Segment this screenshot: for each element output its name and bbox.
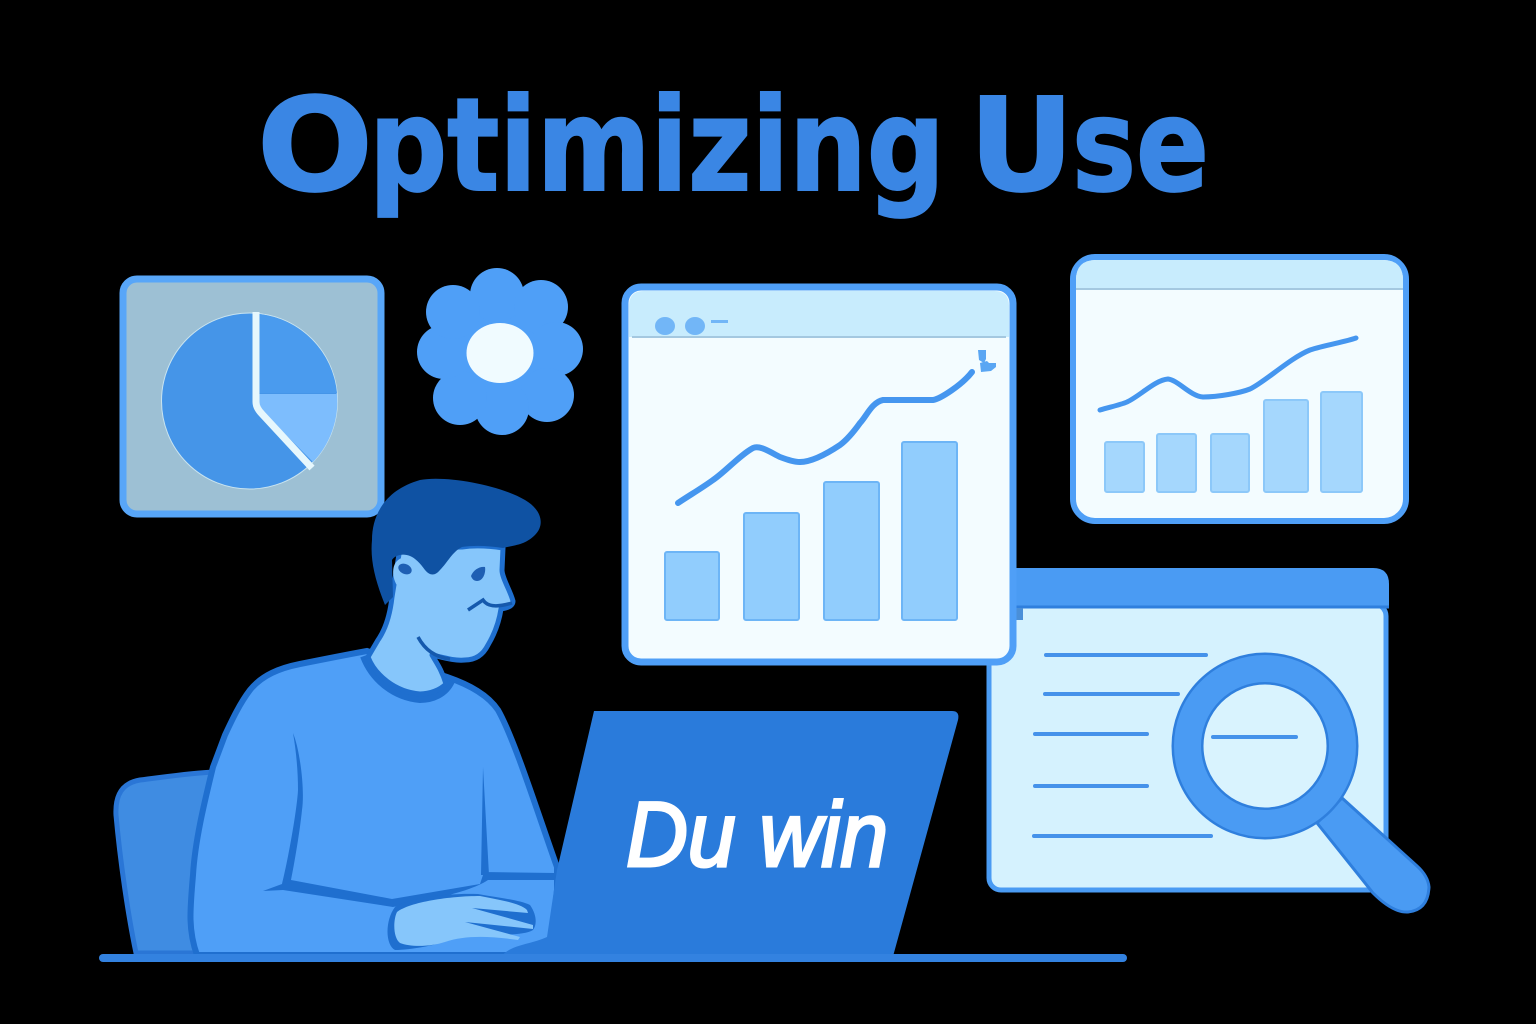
window controls	[655, 317, 728, 335]
title: O	[257, 71, 373, 221]
panel: main chart window	[625, 287, 1013, 662]
eye	[471, 567, 485, 581]
pie chart	[162, 312, 338, 489]
title: U	[969, 71, 1074, 221]
bar chart	[1105, 392, 1362, 492]
line chart	[678, 372, 972, 503]
line chart	[1100, 338, 1356, 410]
desk line	[99, 954, 1127, 962]
person	[190, 479, 557, 955]
title: ptimizing	[369, 71, 945, 221]
head and neck	[368, 546, 513, 694]
panel: pie chart card	[123, 279, 381, 514]
title: se	[1072, 71, 1209, 221]
icon: cursor	[978, 350, 996, 372]
chair	[116, 772, 215, 953]
bar chart	[665, 442, 957, 620]
ear	[393, 558, 425, 594]
torso	[190, 651, 557, 955]
document lines	[1034, 655, 1211, 836]
hair	[372, 479, 541, 605]
panel: small chart window	[1073, 257, 1406, 521]
laptop label: Du win	[626, 784, 888, 886]
neckband	[364, 656, 451, 699]
icon: gear flower	[417, 268, 583, 435]
icon: magnifying glass	[1188, 668, 1429, 912]
hand	[388, 894, 536, 950]
sweater folds	[263, 733, 555, 907]
panel: search document	[989, 568, 1429, 912]
mouth and jaw	[418, 600, 512, 659]
laptop	[500, 711, 958, 960]
